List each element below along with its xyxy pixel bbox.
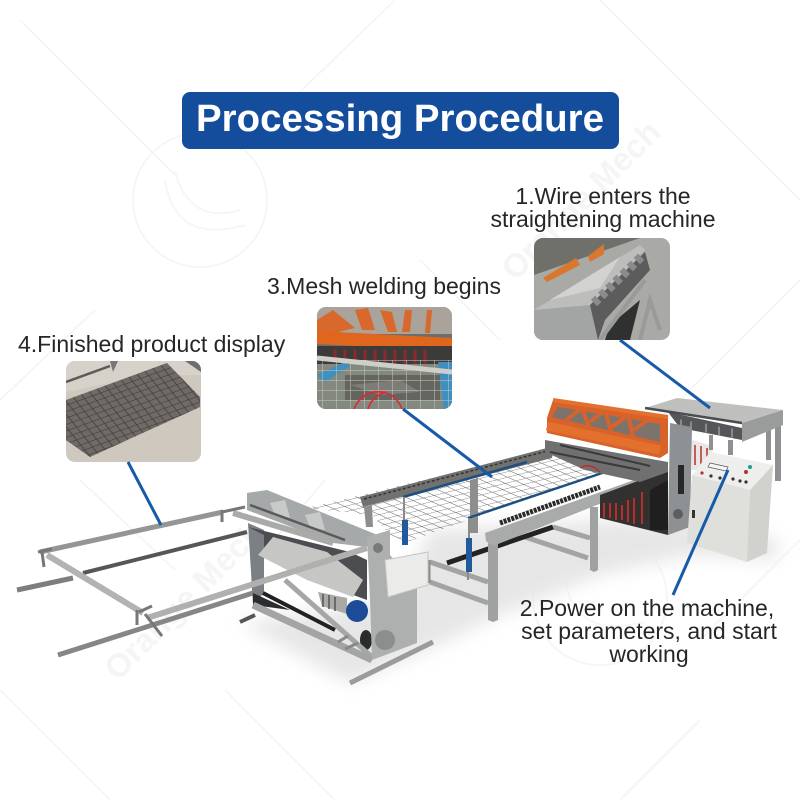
table legs [709, 425, 781, 481]
floor shadow [240, 520, 780, 683]
base rail [253, 605, 372, 660]
black lower bar [447, 527, 553, 563]
table cross braces [430, 527, 590, 603]
end column [367, 530, 417, 660]
brackets [38, 507, 245, 636]
caption: step 4: 4.Finished product display [18, 331, 286, 357]
drive motor [318, 592, 347, 614]
electrical box [385, 552, 428, 597]
roller row [668, 412, 742, 440]
table top [645, 398, 783, 423]
support rails [40, 512, 223, 552]
side rail [485, 468, 668, 546]
lower support bars [83, 532, 247, 573]
cutter left plate [248, 523, 264, 605]
caption: step 2: 2.Power on the machine, [520, 595, 774, 621]
arrow: step 1 leader [620, 340, 710, 408]
diagonal strut [285, 580, 372, 657]
watermark pattern: Orange Mech [494, 113, 668, 287]
arrow: step 2 leader [673, 470, 728, 595]
caption: step 2: set parameters, and start [521, 618, 777, 644]
photo: straightening machine [534, 238, 670, 340]
caption: step 1: 1.Wire enters the [515, 183, 691, 209]
arrow: step 3 leader [403, 409, 492, 477]
machine: welder column [668, 423, 692, 535]
machine: wire mesh on table [307, 450, 640, 542]
table legs [488, 507, 598, 622]
blue guide rails [403, 462, 632, 518]
blue cylinders [404, 497, 469, 580]
orange press frame [547, 400, 668, 458]
photo: mesh welding [317, 307, 452, 410]
caption: step 3: 3.Mesh welding begins [267, 273, 501, 299]
table back rail [360, 448, 553, 507]
welder lower body [600, 470, 668, 535]
title [182, 92, 619, 149]
table support columns [364, 478, 478, 533]
caption: step 1: straightening machine [490, 206, 716, 232]
title: Processing Procedure [196, 98, 604, 140]
drive belt [263, 593, 335, 630]
white electrical boxes [692, 440, 712, 470]
sheet chute [258, 537, 363, 597]
machine: welding unit [545, 400, 668, 535]
arrow: step 4 leader [128, 462, 161, 525]
photo: finished mesh [66, 361, 201, 462]
caption: step 2: working [608, 641, 689, 667]
dark cutter interior [248, 527, 367, 600]
machine: straightening table [645, 398, 783, 481]
machine: control cabinet [687, 452, 773, 562]
machine: collection frame [17, 490, 433, 683]
watermark pattern: Orange Mech [97, 513, 271, 687]
cutter top beam [247, 490, 380, 547]
machine: mesh table [360, 448, 668, 622]
welder electrode bed [545, 440, 668, 482]
floor foot [350, 642, 433, 683]
table side [742, 410, 783, 442]
